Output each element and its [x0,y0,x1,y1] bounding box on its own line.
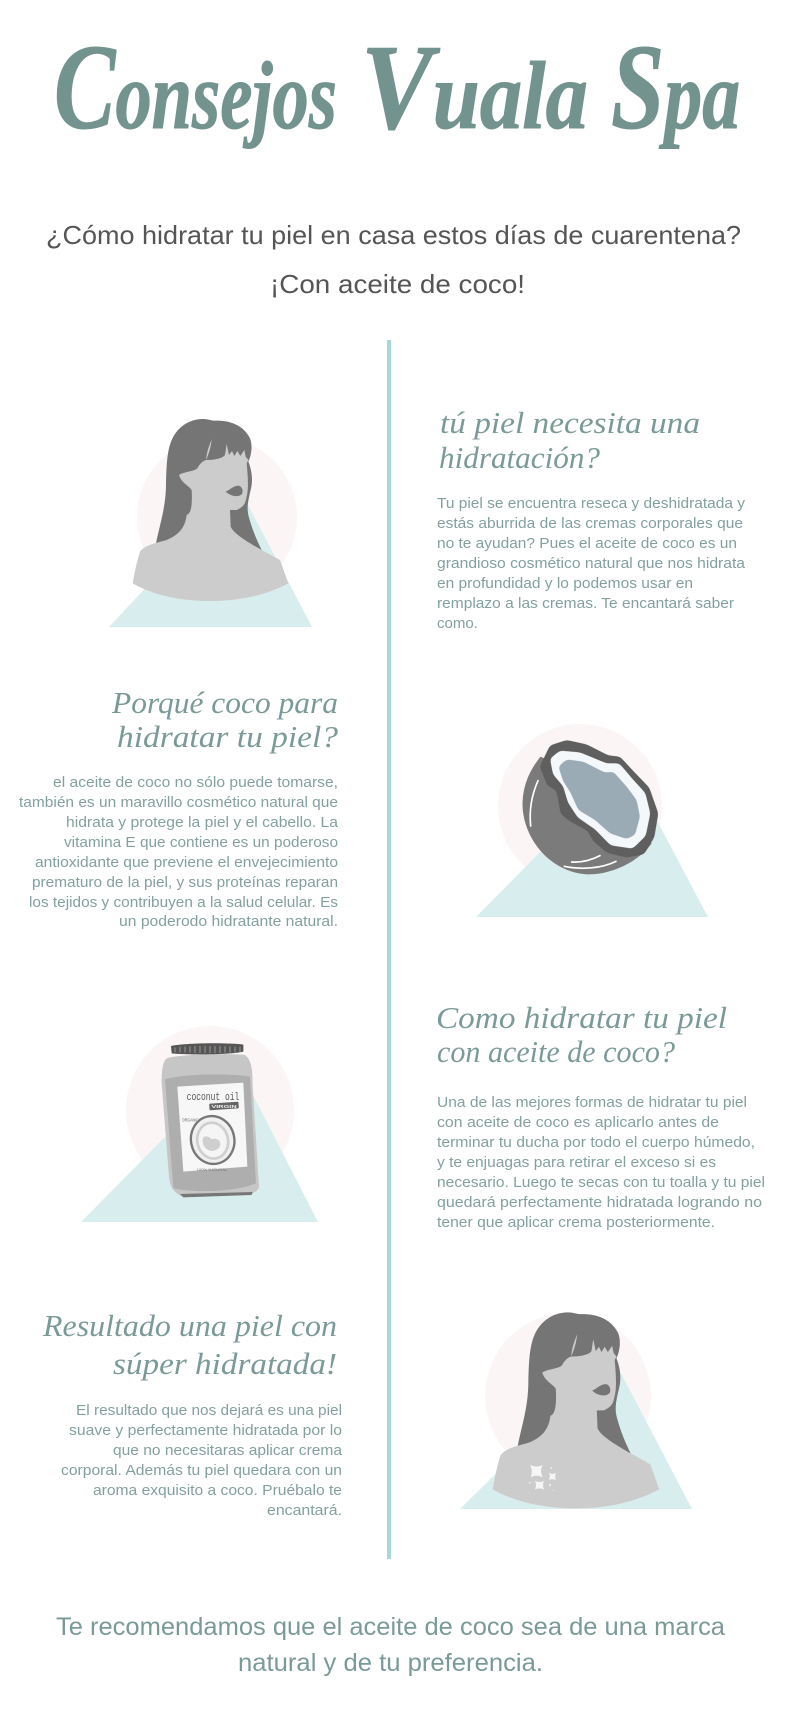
body text: los tejidos y contribuyen a la salud celular. Es [29,894,338,911]
illustration: coconut oil jar with triangle and circle: ORGANIC [182,1117,199,1122]
panel: skin needs hydration [437,405,746,632]
illustration: coconut oil jar with triangle and circle: VIRGIN [211,1104,238,1109]
heading [439,405,700,475]
footer recommendation: Te recomendamos que el aceite de coco sea de una marca [56,1613,725,1641]
illustration: coconut oil jar with triangle and circle: 100% NATURAL [197,1168,228,1172]
body text: quedará perfectamente hidratada logrando no [437,1194,762,1211]
heading: Porqué coco para [111,685,338,720]
panel: result [42,1308,343,1519]
body text: estás aburrida de las cremas corporales que [437,515,743,532]
heading: Resultado una piel con [42,1308,337,1343]
body text: también es un maravillo cosmético natural que [19,794,338,811]
subtitle [46,220,741,299]
body text: vitamina E que contiene es un poderoso [64,834,338,851]
body text: necesario. Luego te secas con tu toalla y tu piel [437,1174,765,1191]
body text: Tu piel se encuentra reseca y deshidratada y [437,495,746,512]
heading: hidratar tu piel? [117,719,339,754]
body text: hidrata y protege la piel y el cabello. La [66,814,339,831]
heading [42,1308,337,1381]
heading: tú piel necesita una [440,405,700,440]
body text: corporal. Además tu piel quedara con un [61,1462,342,1479]
center divider line [387,340,391,1559]
title [54,20,740,155]
body text: terminar tu ducha por todo el cuerpo húmedo, [437,1134,755,1151]
illustration: coconut with triangle and circle [476,724,708,917]
heading: con aceite de coco? [437,1034,675,1069]
body text: encantará. [267,1502,342,1519]
body text: con aceite de coco es aplicarlo antes de [437,1114,719,1131]
footer recommendation: natural y de tu preferencia. [238,1649,543,1677]
body text: el aceite de coco no sólo puede tomarse, [53,774,338,791]
body text: suave y perfectamente hidratada por lo [69,1422,342,1439]
panel: how to hydrate [436,1000,765,1231]
illustration: hydrated woman with sparkles [460,1312,692,1509]
body text: como. [437,615,478,632]
body text: un poderodo hidratante natural. [119,913,338,930]
body text: remplazo a las cremas. Te encantará saber [437,595,734,612]
heading [111,685,339,754]
footer recommendation [56,1613,725,1677]
body text: prematuro de la piel, y sus proteínas reparan [32,874,338,891]
heading: Como hidratar tu piel [436,1000,727,1035]
body text: que no necesitaras aplicar crema [113,1442,343,1459]
body text: antioxidante que previene el envejecimiento [35,854,338,871]
title: Vuala [361,20,588,155]
icon: sparkles [529,1465,556,1491]
illustration: coconut oil jar with triangle and circle [81,1026,318,1222]
illustration: woman with triangle and circle [109,419,312,627]
body text: en profundidad y lo podemos usar en [437,575,693,592]
body text [437,495,746,632]
panel: why coconut [19,685,339,930]
heading [436,1000,727,1069]
title: Consejos [54,20,337,155]
body text: grandioso cosmético natural que nos hidrata [437,555,746,572]
body text: tener que aplicar crema posteriormente. [437,1214,715,1231]
heading: súper hidratada! [113,1346,337,1381]
body text: y te enjuagas para retirar el exceso si es [437,1154,716,1171]
subtitle: ¡Con aceite de coco! [270,269,525,299]
body text: Una de las mejores formas de hidratar tu piel [437,1094,747,1111]
title: Spa [611,20,740,155]
label text: coconut oil [187,1092,239,1104]
subtitle: ¿Cómo hidratar tu piel en casa estos días de cuarentena? [46,220,741,250]
body text [19,774,339,930]
body text: aroma exquisito a coco. Pruébalo te [93,1482,342,1499]
body text: no te ayudan? Pues el aceite de coco es un [437,535,737,552]
heading: hidratación? [439,440,600,475]
body text [437,1094,765,1231]
body text [61,1402,343,1519]
body text: El resultado que nos dejará es una piel [76,1402,342,1419]
